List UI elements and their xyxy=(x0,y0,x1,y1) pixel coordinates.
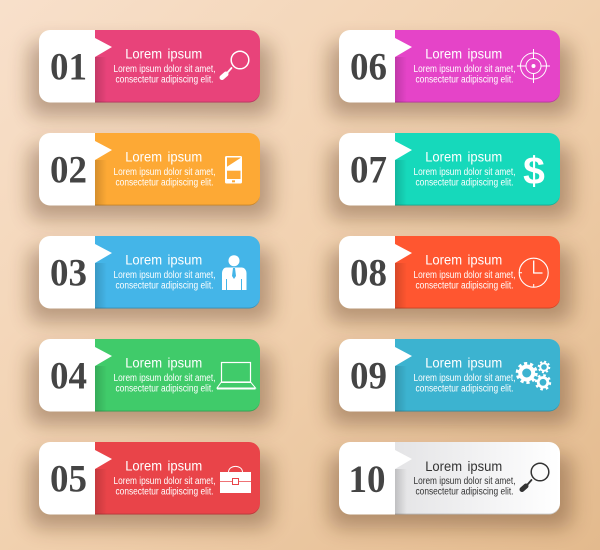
number 01: 01 xyxy=(50,46,87,88)
icon: dollar sign: $ xyxy=(523,150,545,193)
icon: briefcase xyxy=(220,466,251,493)
heading 02: Lorem ipsum xyxy=(125,148,202,164)
text block 02: Lorem ipsum dolor sit amet, xyxy=(114,167,216,178)
icon: smartphone xyxy=(225,156,242,184)
text block 04: consectetur adipiscing elit. xyxy=(116,383,214,394)
text block 05 xyxy=(114,476,216,497)
card 03 xyxy=(29,236,272,322)
text block 03: Lorem ipsum dolor sit amet, xyxy=(114,270,216,281)
panel: colour body 08 xyxy=(395,236,560,308)
icon: dark magnifier xyxy=(522,463,549,490)
text block 07: Lorem ipsum dolor sit amet, xyxy=(414,167,516,178)
number 10: 10 xyxy=(348,458,386,501)
number 08: 08 xyxy=(350,252,387,294)
icon: businessman xyxy=(222,255,246,290)
heading 01: Lorem ipsum xyxy=(125,46,202,62)
text block 07: consectetur adipiscing elit. xyxy=(416,177,514,188)
heading 06: Lorem ipsum xyxy=(425,46,502,62)
icon: clock xyxy=(519,258,548,287)
number 02: 02 xyxy=(50,148,87,192)
panel: colour body 01 xyxy=(95,30,260,102)
text block 03: consectetur adipiscing elit. xyxy=(116,280,214,291)
card 04 xyxy=(29,339,272,425)
number 07: 07 xyxy=(350,148,387,192)
icon: magnifier xyxy=(222,51,249,78)
card 09 xyxy=(329,339,572,425)
heading 09: Lorem ipsum xyxy=(425,354,502,370)
card 06 xyxy=(329,30,572,116)
text block 06: consectetur adipiscing elit. xyxy=(416,74,514,85)
card 01 xyxy=(29,30,272,116)
heading 10: Lorem ipsum xyxy=(425,458,502,474)
number 05: 05 xyxy=(50,458,87,500)
card 05 xyxy=(29,442,272,528)
panel: colour body 07 xyxy=(395,133,560,206)
panel: colour body 05 xyxy=(95,442,260,514)
number 06: 06 xyxy=(350,46,387,88)
number 09: 09 xyxy=(350,354,387,398)
heading 03: Lorem ipsum xyxy=(125,252,202,268)
text block 04 xyxy=(114,373,216,394)
text block 07 xyxy=(414,167,516,188)
heading 08: Lorem ipsum xyxy=(425,252,502,268)
text block 10: consectetur adipiscing elit. xyxy=(416,486,514,498)
text block 08: Lorem ipsum dolor sit amet, xyxy=(414,270,516,281)
icon: gears xyxy=(517,362,550,389)
text block 03 xyxy=(114,270,216,291)
panel: colour body 02 xyxy=(95,133,260,206)
text block 06 xyxy=(414,64,516,85)
text block 04: Lorem ipsum dolor sit amet, xyxy=(114,373,216,384)
text block 05: consectetur adipiscing elit. xyxy=(116,486,214,497)
panel: colour body 04 xyxy=(95,339,260,412)
text block 09: Lorem ipsum dolor sit amet, xyxy=(414,373,516,384)
text block 09 xyxy=(414,373,516,394)
card 02 xyxy=(29,133,272,219)
number 03: 03 xyxy=(50,252,87,294)
text block 08: consectetur adipiscing elit. xyxy=(416,280,514,291)
text block 02: consectetur adipiscing elit. xyxy=(116,177,214,188)
icon: target xyxy=(517,49,550,83)
icon: laptop xyxy=(217,362,256,390)
number 04: 04 xyxy=(50,354,87,398)
text block 01: consectetur adipiscing elit. xyxy=(116,74,214,85)
panel: colour body 06 xyxy=(395,30,560,102)
heading 07: Lorem ipsum xyxy=(425,148,502,164)
heading 05: Lorem ipsum xyxy=(125,458,202,474)
panel: white body 10 xyxy=(395,442,560,514)
text block 09: consectetur adipiscing elit. xyxy=(416,383,514,394)
card 08 xyxy=(329,236,572,322)
text block 01 xyxy=(114,64,216,85)
card 10 xyxy=(329,442,572,528)
text block 05: Lorem ipsum dolor sit amet, xyxy=(114,476,216,487)
heading 04: Lorem ipsum xyxy=(125,354,202,370)
text block 08 xyxy=(414,270,516,291)
text block 02 xyxy=(114,167,216,188)
card 07 xyxy=(329,133,572,219)
text block 10: Lorem ipsum dolor sit amet, xyxy=(414,476,516,487)
text block 01: Lorem ipsum dolor sit amet, xyxy=(114,64,216,75)
panel: colour body 09 xyxy=(395,339,560,412)
text block 10 xyxy=(414,476,516,498)
panel: colour body 03 xyxy=(95,236,260,308)
text block 06: Lorem ipsum dolor sit amet, xyxy=(414,64,516,75)
